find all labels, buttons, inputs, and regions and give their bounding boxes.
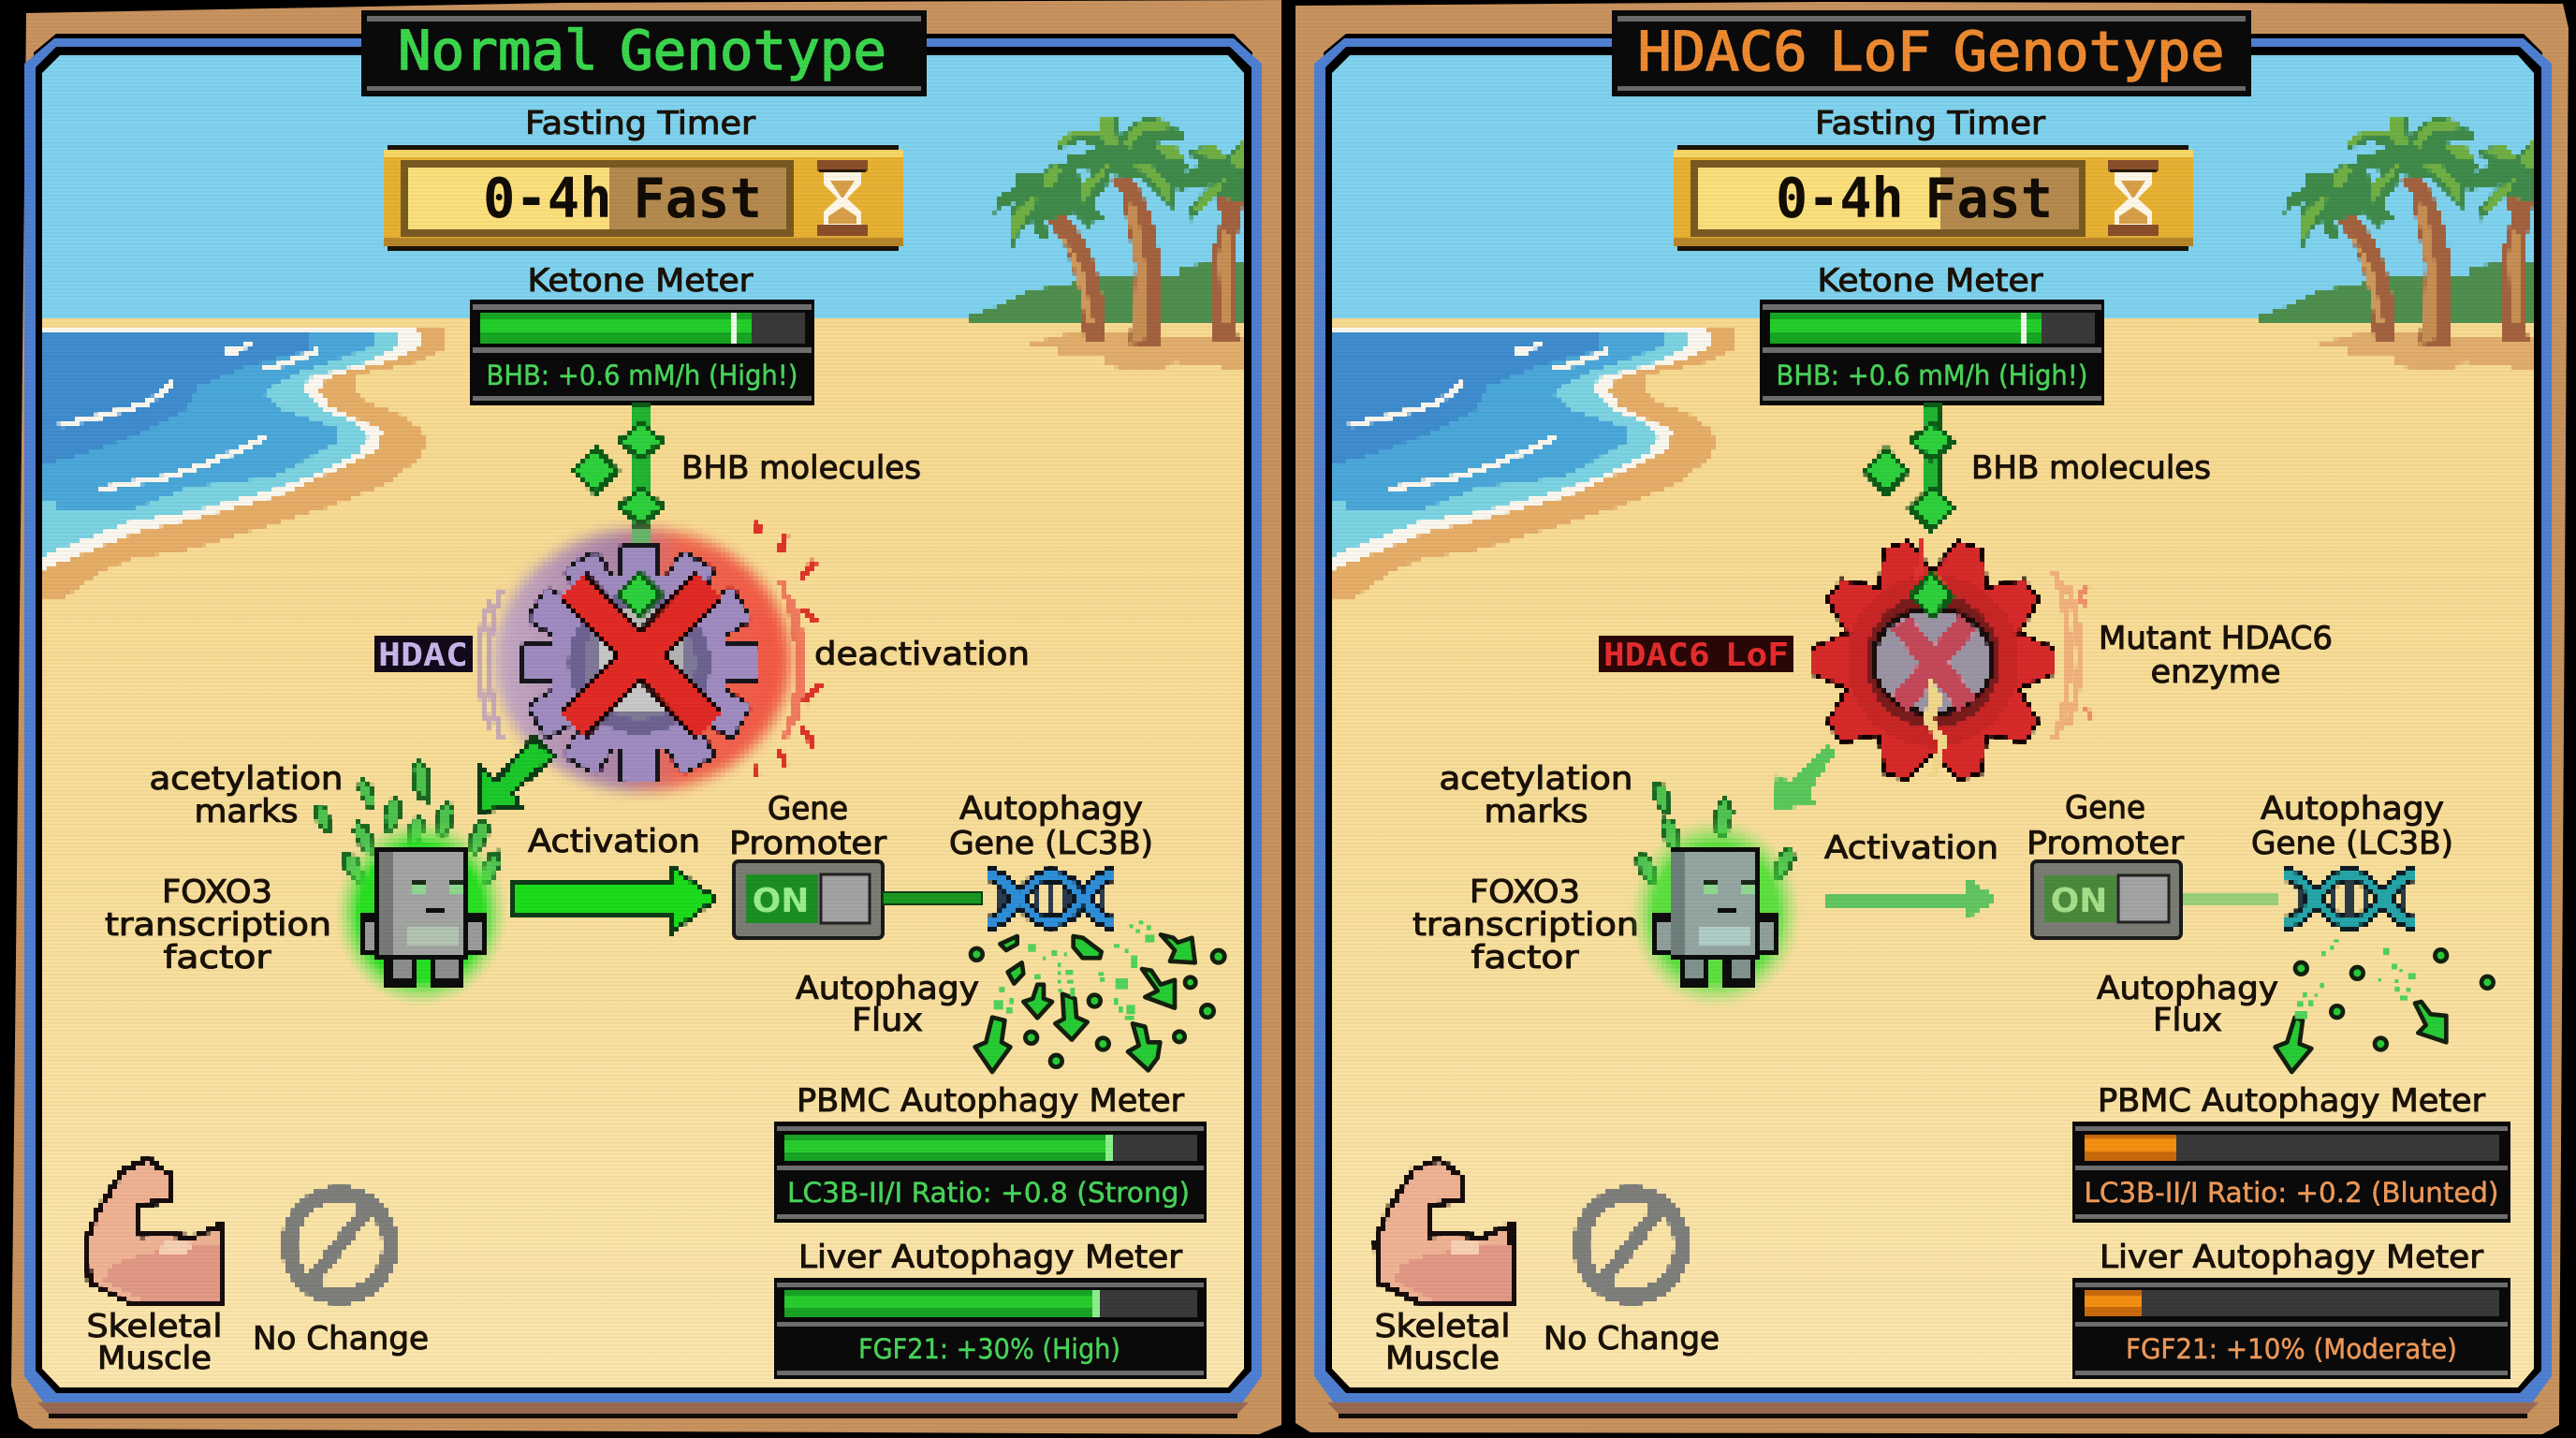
fasting timer label: Fasting Timer <box>1815 105 2045 142</box>
fasting timer label: Fasting Timer <box>525 105 755 142</box>
gene promoter label: Gene <box>2065 789 2145 827</box>
autophagy gene label line two: Gene (LC3B) <box>2251 825 2453 862</box>
muscle label: Muscle <box>97 1340 212 1377</box>
HDAC gear with X <box>479 522 820 791</box>
factor label: factor <box>163 939 271 976</box>
ketone meter: BHB: +0.6 mM/h (High!) <box>487 360 798 391</box>
arrow: HDAC to FOXO3 <box>479 738 554 811</box>
autophagy gene label: Autophagy <box>2261 790 2444 828</box>
ketone meter: BHB: +0.6 mM/h (High!) <box>1777 360 2087 391</box>
BHB molecules label: BHB molecules <box>681 449 921 487</box>
wooden frame <box>1295 2 2569 1434</box>
activation label: Activation <box>1824 829 1998 867</box>
autophagy flux label: Autophagy <box>796 970 979 1007</box>
title <box>361 10 927 96</box>
faint promoter connector <box>2183 893 2278 905</box>
acetyl leaves <box>1632 779 1798 888</box>
no change label: No Change <box>1544 1320 1720 1357</box>
BHB molecules <box>574 405 663 527</box>
PBMC autophagy meter <box>2072 1122 2510 1223</box>
fasting timer <box>1674 145 2193 251</box>
toggle switch ON <box>734 861 883 938</box>
PBMC autophagy meter: LC3B-II/I Ratio: +0.8 (Strong) <box>787 1177 1190 1209</box>
ketone meter label: Ketone Meter <box>1818 262 2043 300</box>
deactivation label: deactivation <box>814 636 1030 673</box>
panel: HDAC6 LoF genotype <box>1295 2 2569 1434</box>
acetyl leaves <box>312 759 505 887</box>
fasting timer <box>384 145 903 251</box>
ketone meter <box>470 300 814 405</box>
muscle label: Muscle <box>1385 1340 1500 1377</box>
flux label line two: Flux <box>852 1002 923 1039</box>
icon: no change <box>1581 1194 1682 1297</box>
mutant HDAC6 label: Mutant HDAC6 <box>2099 620 2333 657</box>
skeletal label: Skeletal <box>1374 1308 1511 1345</box>
icon: muscle <box>1376 1159 1512 1304</box>
FOXO3 label: FOXO3 <box>1470 873 1580 911</box>
PBMC meter label: PBMC Autophagy Meter <box>2098 1082 2485 1120</box>
gene promoter label line two: Promoter <box>2027 825 2184 862</box>
BHB molecules <box>1865 405 1954 530</box>
no change label: No Change <box>253 1320 429 1357</box>
transcription label: transcription <box>105 906 331 944</box>
title: HDAC6 LoF Genotype <box>1638 20 2224 83</box>
liver meter label: Liver Autophagy Meter <box>2100 1239 2483 1276</box>
gene promoter label line two: Promoter <box>729 825 886 862</box>
title: Normal Genotype <box>398 19 886 82</box>
toggle switch ON dim <box>2032 861 2181 938</box>
HDAC label: HDAC <box>378 637 468 674</box>
wooden frame <box>11 0 1281 1434</box>
liver autophagy meter <box>774 1278 1207 1379</box>
acetylation marks label: acetylation <box>150 760 343 798</box>
ketone meter label: Ketone Meter <box>528 262 754 300</box>
acetylation marks label: acetylation <box>1440 760 1632 798</box>
toggle switch ON dim: ON <box>2051 882 2107 920</box>
PBMC autophagy meter <box>774 1122 1207 1223</box>
panel: normal genotype <box>11 0 1281 1434</box>
window frame <box>1314 34 2552 1418</box>
FOXO3 robot <box>335 819 507 1006</box>
faint activation arrow <box>1827 877 1998 919</box>
FOXO3 robot <box>1630 817 1802 1008</box>
BHB molecules label: BHB molecules <box>1971 449 2211 487</box>
liver autophagy meter: FGF21: +30% (High) <box>858 1333 1120 1365</box>
beach scene <box>1330 55 2538 1387</box>
toggle switch ON: ON <box>753 882 809 920</box>
promoter connector <box>883 892 982 904</box>
activation label: Activation <box>528 823 700 860</box>
autophagy gene label: Autophagy <box>959 790 1143 828</box>
liver autophagy meter: FGF21: +10% (Moderate) <box>2126 1333 2457 1365</box>
beach scene <box>40 55 1248 1387</box>
autophagy flux label: Autophagy <box>2097 970 2278 1007</box>
sparse autophagy flux particles <box>2276 939 2494 1072</box>
PBMC autophagy meter: LC3B-II/I Ratio: +0.2 (Blunted) <box>2084 1177 2499 1209</box>
fasting timer: 0-4h Fast <box>1776 166 2053 230</box>
marks label line two: marks <box>195 793 298 830</box>
marks label line two: marks <box>1485 793 1588 830</box>
fasting timer: 0-4h Fast <box>483 166 762 230</box>
faint arrow: HDAC6 to FOXO3 <box>1775 745 1837 811</box>
skeletal label: Skeletal <box>86 1308 222 1345</box>
HDAC6 LoF label: HDAC6 LoF <box>1603 637 1789 674</box>
title <box>1612 10 2251 96</box>
transcription label: transcription <box>1412 906 1639 944</box>
enzyme label: enzyme <box>2151 653 2280 691</box>
icon: muscle <box>86 1159 222 1304</box>
autophagy flux particles <box>971 920 1224 1072</box>
flux label line two: Flux <box>2153 1002 2222 1039</box>
gene promoter label: Gene <box>768 790 848 828</box>
factor label: factor <box>1471 939 1579 976</box>
mutant HDAC6 gear <box>1813 534 2093 784</box>
liver meter label: Liver Autophagy Meter <box>798 1239 1182 1276</box>
DNA helix teal <box>2286 874 2415 923</box>
activation arrow <box>512 866 716 933</box>
window frame <box>24 34 1262 1418</box>
autophagy gene label line two: Gene (LC3B) <box>949 825 1153 862</box>
DNA helix <box>988 874 1114 923</box>
liver autophagy meter <box>2072 1278 2510 1379</box>
icon: no change <box>289 1194 390 1297</box>
FOXO3 label: FOXO3 <box>162 873 272 911</box>
PBMC meter label: PBMC Autophagy Meter <box>797 1082 1184 1120</box>
ketone meter <box>1760 300 2104 405</box>
